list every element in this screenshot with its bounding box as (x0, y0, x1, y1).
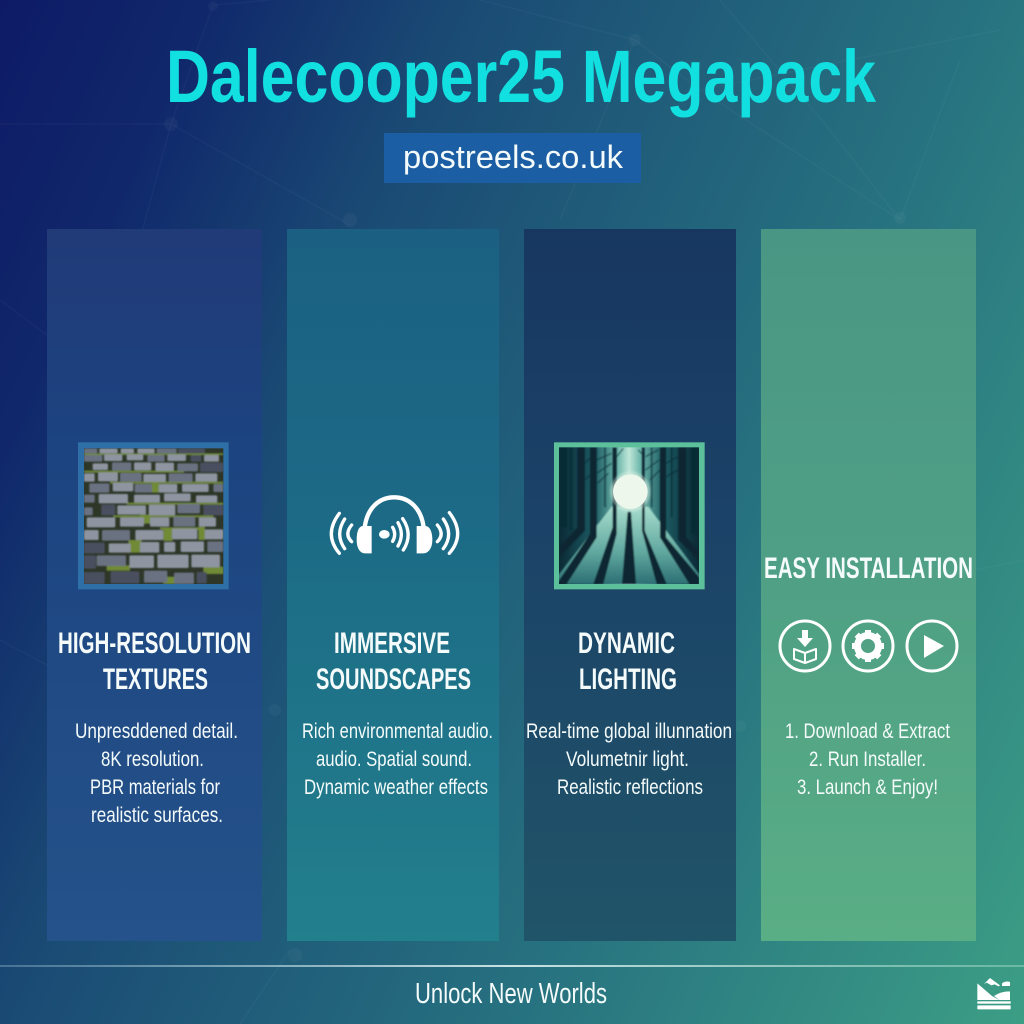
steps: 2. Run Installer. (809, 748, 926, 771)
image: cobblestone texture (78, 442, 229, 589)
panel: high-resolution textures (47, 229, 262, 941)
icon: download (780, 621, 830, 671)
description (302, 720, 493, 799)
heading (316, 627, 471, 696)
icon: headphones with sound waves (331, 497, 458, 553)
image: moonlit forest (551, 442, 707, 589)
subtitle badge (384, 133, 641, 183)
footer tagline: Unlock New Worlds (415, 978, 607, 1010)
steps: 1. Download & Extract (785, 720, 950, 743)
subtitle badge: postreels.co.uk (403, 139, 624, 175)
description: Dynamic weather effects (304, 776, 488, 799)
heading: DYNAMIC (578, 627, 675, 660)
steps: 3. Launch & Enjoy! (797, 776, 938, 799)
description: Volumetnir light. (566, 748, 689, 771)
panel: immersive soundscapes (287, 229, 499, 941)
heading (58, 627, 251, 696)
heading: HIGH-RESOLUTION (58, 627, 251, 660)
description: Rich environmental audio. (302, 720, 493, 743)
title: Dalecooper25 Megapack (166, 35, 877, 118)
heading: SOUNDSCAPES (316, 663, 471, 696)
description: Realistic reflections (557, 776, 703, 799)
steps (785, 720, 950, 799)
description: realistic surfaces. (91, 804, 223, 827)
heading: TEXTURES (103, 663, 208, 696)
icon: gear (843, 621, 893, 671)
description: Unpresddened detail. (75, 720, 238, 743)
heading (578, 627, 677, 696)
background network nodes (164, 1, 906, 962)
description: audio. Spatial sound. (316, 748, 472, 771)
description: 8K resolution. (101, 748, 204, 771)
panel: easy installation (761, 229, 976, 941)
description (75, 720, 238, 827)
heading: IMMERSIVE (334, 627, 450, 660)
description: PBR materials for (90, 776, 220, 799)
description (526, 720, 732, 799)
icon: landscape logo (977, 978, 1011, 1009)
description: Real-time global illunnation (526, 720, 732, 743)
heading: LIGHTING (579, 663, 677, 696)
moon (610, 472, 650, 512)
panel: dynamic lighting (524, 229, 736, 941)
footer divider (0, 965, 1024, 967)
icon: play (907, 621, 957, 671)
